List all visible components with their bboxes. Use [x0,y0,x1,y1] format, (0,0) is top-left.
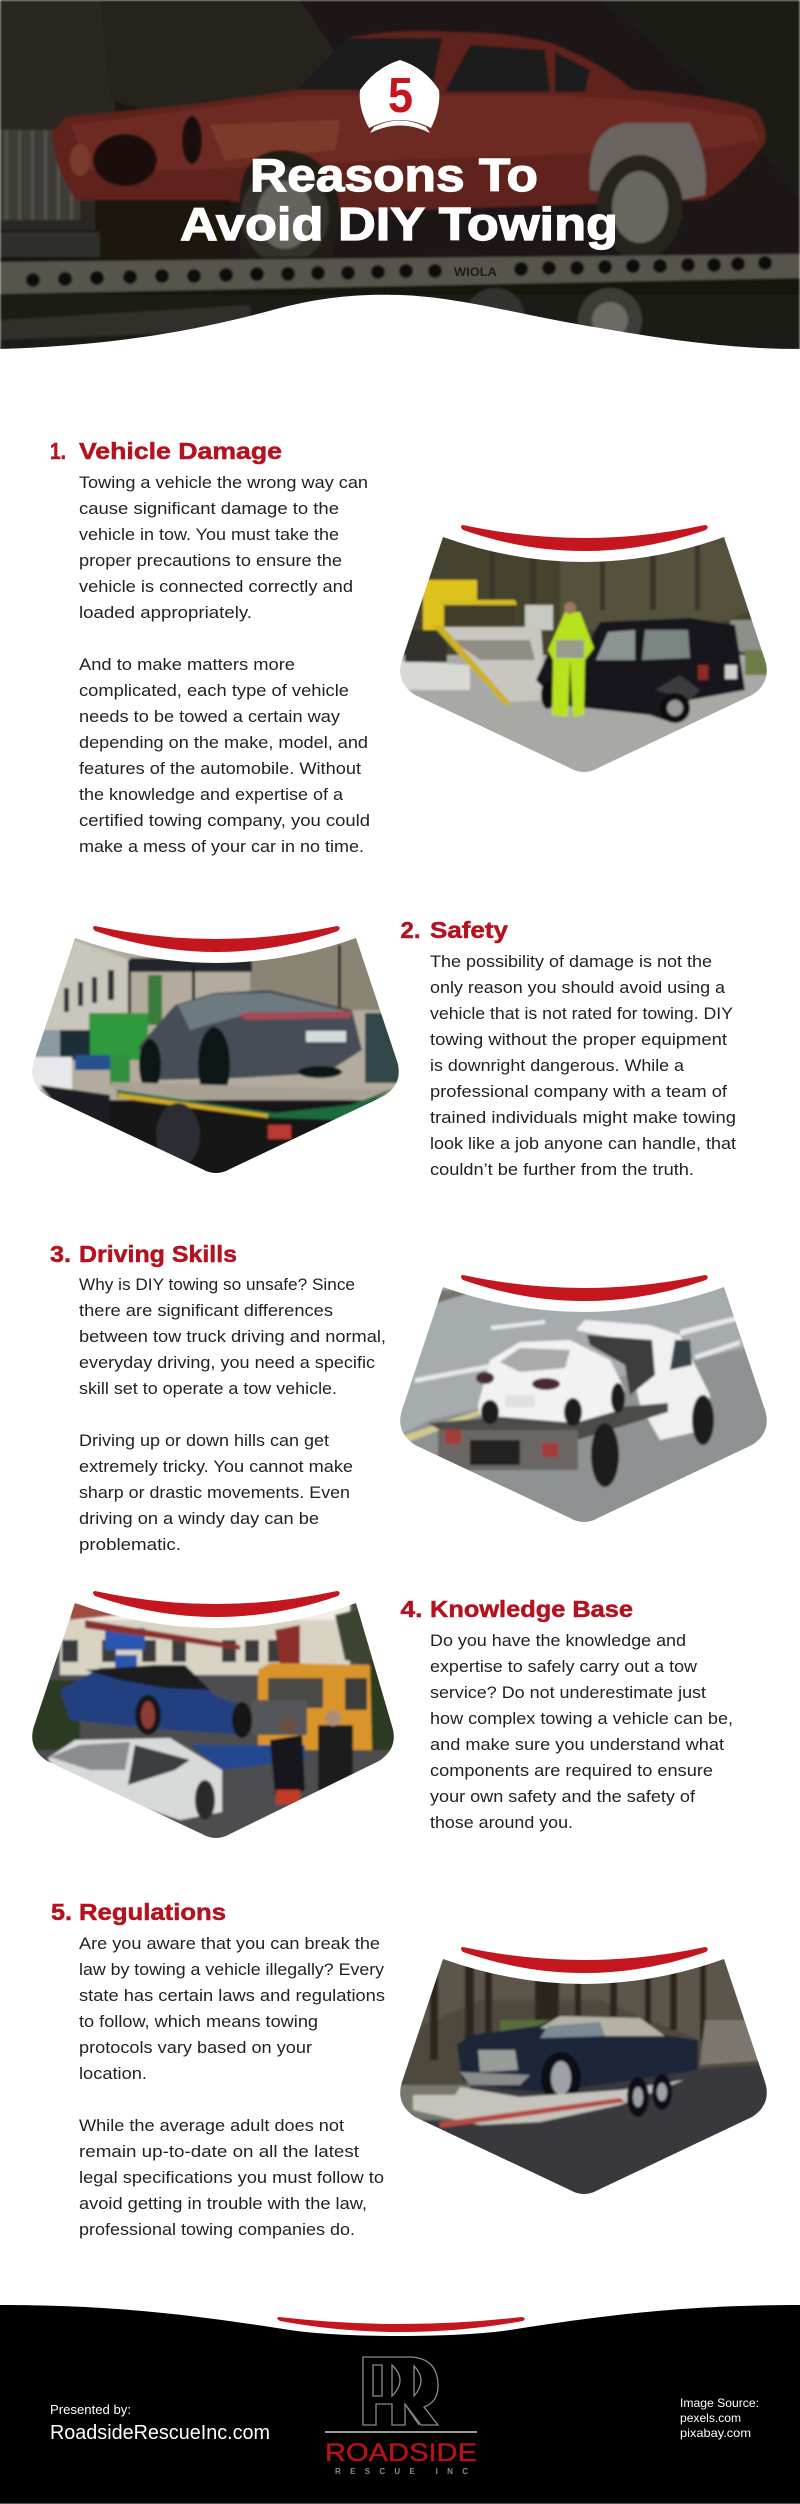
section 1 body text: cause significant damage to the [79,500,339,518]
section 2 body text: look like a job anyone can handle, that [430,1135,736,1153]
section 5 body text: law by towing a vehicle illegally? Every [79,1961,385,1979]
section 4 body text: expertise to safely carry out a tow [430,1658,697,1676]
section 2 body text: vehicle that is not rated for towing. DIY [430,1005,733,1023]
title: Avoid DIY Towing [180,198,618,250]
section 3 body text: driving on a windy day can be [79,1510,319,1528]
section 2 body text: The possibility of damage is not the [430,953,712,971]
section 5 body text: to follow, which means towing [79,2013,318,2031]
title: Reasons To [250,149,538,201]
footer wave background [0,2305,800,2504]
section 5 heading: Regulations: Regulations [79,1899,226,1925]
section 1 body text: depending on the make, model, and [79,734,368,752]
presented by: RoadsideRescueInc.com [50,2422,270,2444]
section 3 body text: Why is DIY towing so unsafe? Since [79,1276,355,1294]
section 1 heading: Vehicle Damage: Vehicle Damage [79,438,282,464]
section 4 red arc [93,1591,340,1617]
section 5 heading: Regulations: 5. [51,1899,72,1925]
section 4 body text: your own safety and the safety of [430,1788,695,1806]
section 3 body text: sharp or drastic movements. Even [79,1484,350,1502]
section 4 body text: those around you. [430,1814,573,1832]
section 1 photo: tow truck and damaged black car [400,537,767,772]
section 4 body text: how complex towing a vehicle can be, [430,1710,733,1728]
icon: firefighter helmet badge with number 5: 5 [388,69,413,123]
section 5 body text: avoid getting in trouble with the law, [79,2195,367,2213]
header photo: wrecked red car on trailer [0,0,800,352]
section 1 body text [79,474,370,856]
section 1 body text: complicated, each type of vehicle [79,682,349,700]
icon: firefighter helmet badge with number 5 [360,60,439,133]
section 3 body text: Driving up or down hills can get [79,1432,329,1450]
section 3 heading: Driving Skills: Driving Skills [79,1241,237,1267]
section 5 body text: Are you aware that you can break the [79,1935,380,1953]
section 2 body text: trained individuals might make towing [430,1109,736,1127]
section 1 body text: And to make matters more [79,656,295,674]
section 1 body text: Towing a vehicle the wrong way can [79,474,368,492]
section 1 body text: vehicle in tow. You must take the [79,526,339,544]
image sources: pexels.com [680,2411,741,2425]
section 2 body text: only reason you should avoid using a [430,979,726,997]
section 5 body text: While the average adult does not [79,2117,344,2135]
footer bottom edge [0,2503,800,2504]
image sources: Image Source: [680,2396,759,2410]
section 4 body text: and make sure you understand what [430,1736,724,1754]
section 4 heading: Knowledge Base: 4. [400,1596,422,1622]
section 2 heading: Safety: 2. [400,917,420,943]
footer red arc [277,2317,525,2332]
section 3 body text: extremely tricky. You cannot make [79,1458,353,1476]
section 1 body text: vehicle is connected correctly and [79,578,353,596]
section 5 body text [79,1935,385,2239]
section 3 body text: between tow truck driving and normal, [79,1328,386,1346]
section 3 red arc [461,1275,708,1301]
section 5 body text: state has certain laws and regulations [79,1987,385,2005]
section 5 body text: protocols vary based on your [79,2039,313,2057]
section 2 body text: couldn’t be further from the truth. [430,1161,694,1179]
section 1 body text: features of the automobile. Without [79,760,361,778]
section 3 body text: skill set to operate a tow vehicle. [79,1380,337,1398]
section 3 body text: everyday driving, you need a specific [79,1354,375,1372]
image sources: pixabay.com [680,2426,751,2440]
section 5 body text: legal specifications you must follow to [79,2169,384,2187]
trailer brand lettering: WIOLA [454,265,497,279]
section 3 body text: there are significant differences [79,1302,333,1320]
presented by [50,2402,270,2444]
section 5 body text: professional towing companies do. [79,2221,355,2239]
section 5 body text: location. [79,2065,147,2083]
logo: Roadside Rescue Inc: ROADSIDE [325,2439,477,2467]
section 5 body text: remain up-to-date on all the latest [79,2143,360,2161]
section 1 body text: make a mess of your car in no time. [79,838,364,856]
section 3 body text [79,1276,386,1554]
section 1 body text: the knowledge and expertise of a [79,786,344,804]
section 2 body text: professional company with a team of [430,1083,727,1101]
title [180,149,618,250]
section 1 body text: certified towing company, you could [79,812,370,830]
section 1 body text: proper precautions to ensure the [79,552,342,570]
section 4 photo: blue car lifted by crane truck [32,1603,394,1838]
presented by: Presented by: [50,2402,131,2417]
section 3 heading: Driving Skills: 3. [50,1241,71,1267]
section 4 body text [430,1632,733,1832]
section 2 body text: towing without the proper equipment [430,1031,727,1049]
section 1 body text: loaded appropriately. [79,604,252,622]
section 1 heading: Vehicle Damage: 1. [50,438,66,464]
section 3 body text: problematic. [79,1536,181,1554]
logo: Roadside Rescue Inc [325,2357,477,2476]
section 4 body text: Do you have the knowledge and [430,1632,686,1650]
section 3 photo: white car on flatbed tow truck [400,1287,767,1522]
section 2 photo: grey sports car on green flatbed [32,938,399,1173]
section 1 body text: needs to be towed a certain way [79,708,341,726]
section 2 red arc [93,926,340,952]
section 4 heading: Knowledge Base: Knowledge Base [430,1596,633,1622]
section 4 body text: service? Do not underestimate just [430,1684,706,1702]
section 2 heading: Safety: Safety [430,917,508,943]
image sources [680,2396,759,2440]
header wave [0,295,800,400]
section 2 body text: is downright dangerous. While a [430,1057,685,1075]
section 5 red arc [461,1947,708,1973]
section 2 heading: Safety [400,917,508,943]
logo: Roadside Rescue Inc: RESCUE INC [335,2467,468,2476]
section 5 photo: dark blue classic car on silver trailer [400,1959,767,2194]
section 2 body text [430,953,736,1179]
section 4 body text: components are required to ensure [430,1762,713,1780]
section 1 red arc [461,525,708,551]
